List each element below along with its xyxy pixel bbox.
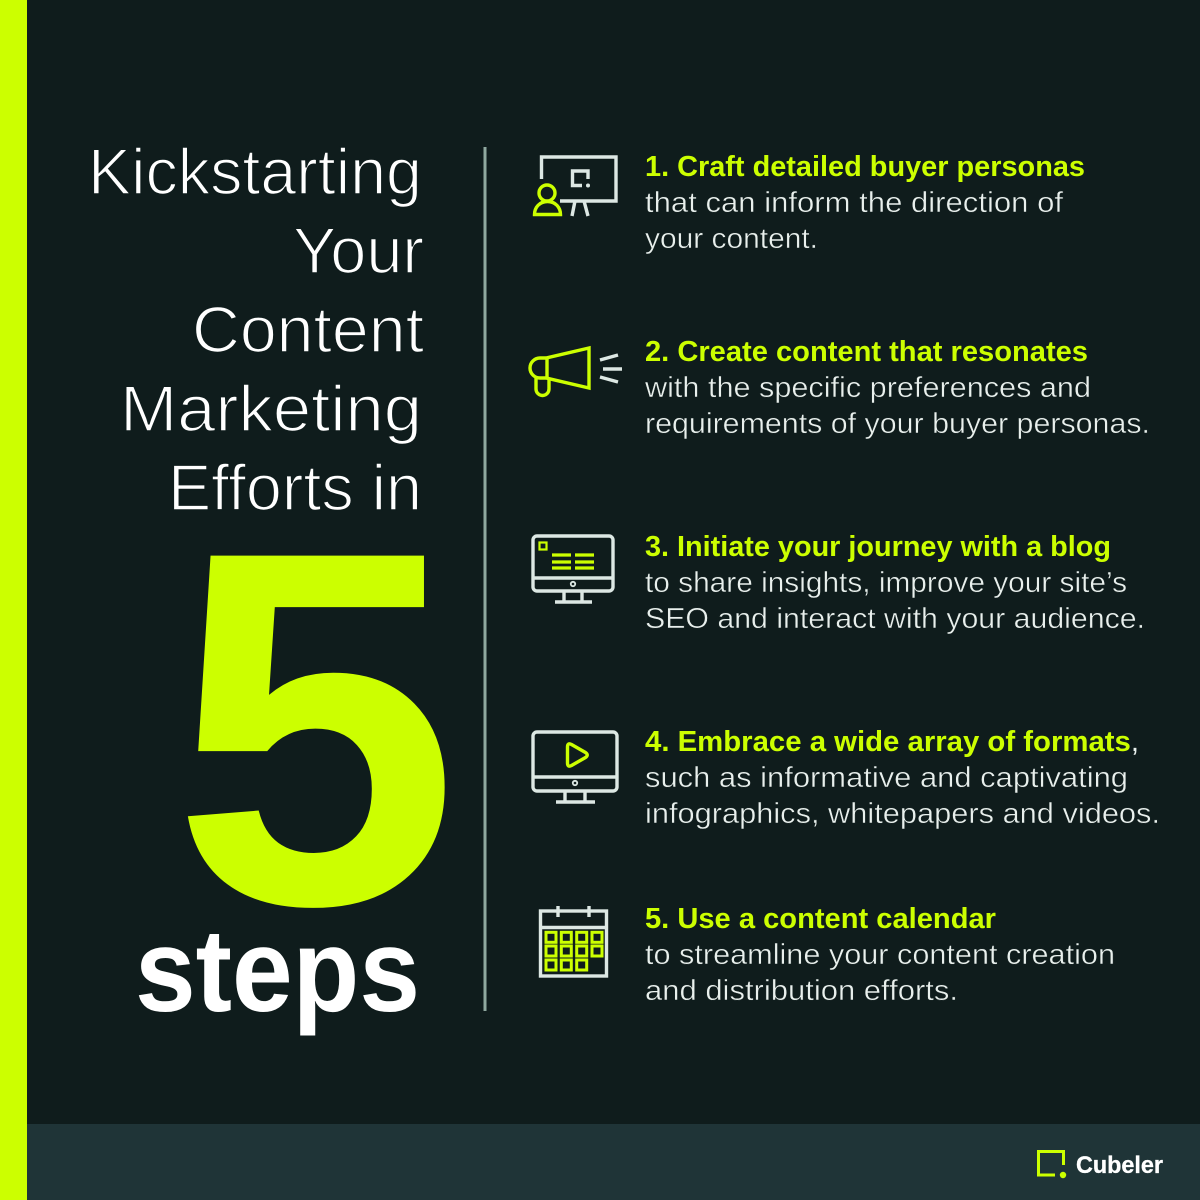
step 1 text: 1. Craft detailed buyer personas bbox=[645, 151, 1085, 183]
steps label: steps bbox=[135, 905, 420, 1037]
title: Content bbox=[192, 293, 424, 366]
icon: video monitor bbox=[533, 732, 617, 802]
lime side bar bbox=[0, 0, 27, 1200]
step 2 text: with the specific preferences and bbox=[644, 372, 1091, 404]
step 1 bbox=[534, 151, 1085, 255]
step 5 text: 5. Use a content calendar bbox=[645, 903, 996, 935]
step 5 bbox=[540, 903, 1115, 1007]
icon: calendar bbox=[540, 906, 607, 976]
step 4 text: infographics, whitepapers and videos. bbox=[645, 798, 1160, 830]
step 1 text: that can inform the direction of bbox=[645, 187, 1064, 219]
big number 5: 5 bbox=[172, 447, 459, 1011]
step 3 text: to share insights, improve your site’s bbox=[645, 567, 1127, 599]
footer band bbox=[27, 1124, 1200, 1200]
title: Your bbox=[293, 214, 424, 287]
step 3 bbox=[533, 531, 1145, 635]
step 2 text: requirements of your buyer personas. bbox=[645, 408, 1150, 440]
step 1 text bbox=[645, 151, 1085, 255]
step 2 bbox=[530, 336, 1150, 440]
step 4 bbox=[533, 726, 1160, 830]
step 2 text: 2. Create content that resonates bbox=[645, 336, 1088, 368]
step 5 text bbox=[645, 903, 1115, 1007]
icon: presentation board bbox=[534, 157, 616, 216]
step 4 text bbox=[645, 726, 1160, 830]
step 5 text: and distribution efforts. bbox=[645, 975, 958, 1007]
step 4 text: 4. Embrace a wide array of formats , bbox=[645, 726, 1139, 758]
step 2 text bbox=[644, 336, 1150, 440]
icon: megaphone bbox=[530, 348, 622, 396]
logo: Cubeler bbox=[1038, 1152, 1163, 1179]
step 3 text: 3. Initiate your journey with a blog bbox=[645, 531, 1111, 563]
step 4 text: such as informative and captivating bbox=[645, 762, 1128, 794]
title: Efforts in bbox=[168, 451, 422, 524]
logo: Cubeler: Cubeler bbox=[1076, 1152, 1163, 1179]
title: Marketing bbox=[120, 372, 422, 445]
step 5 text: to streamline your content creation bbox=[645, 939, 1115, 971]
step 3 text bbox=[645, 531, 1145, 635]
icon: blog monitor bbox=[533, 536, 613, 602]
title bbox=[88, 135, 424, 524]
title: Kickstarting bbox=[88, 135, 422, 208]
step 3 text: SEO and interact with your audience. bbox=[645, 603, 1145, 635]
step 1 text: your content. bbox=[645, 223, 818, 255]
